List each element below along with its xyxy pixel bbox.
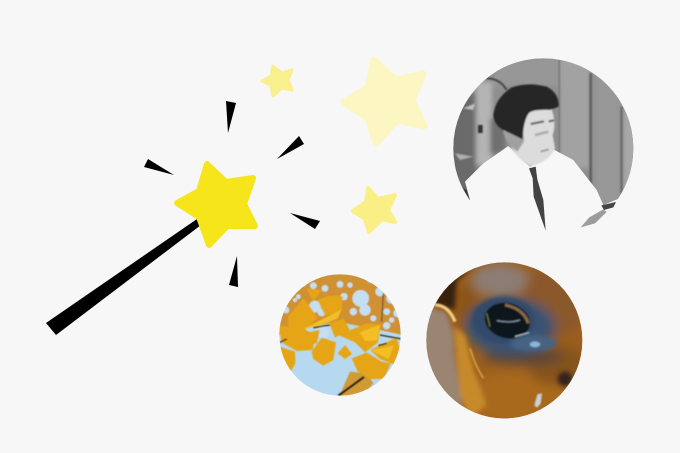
upper orange foliage — [277, 272, 403, 335]
medium star — [353, 188, 395, 232]
sky gaps — [283, 277, 401, 338]
face — [503, 109, 555, 166]
tie — [529, 167, 546, 231]
sparkle rays — [144, 101, 320, 287]
branches — [338, 377, 364, 396]
neck and left band — [426, 306, 465, 407]
photo: horse eye — [423, 260, 587, 425]
large pale star — [344, 60, 424, 143]
gold leaves — [278, 288, 401, 379]
main yellow star — [177, 164, 255, 245]
photo: ginkgo leaves — [277, 272, 403, 398]
eye surround — [472, 297, 535, 343]
magic wand stick — [46, 219, 201, 335]
shirt — [447, 146, 640, 248]
infographic illustration — [46, 56, 634, 418]
hair — [493, 84, 559, 139]
fly — [534, 393, 542, 408]
photo: man in white shirt — [453, 58, 634, 230]
bright leaf highlights — [303, 309, 394, 359]
small star top — [262, 66, 292, 96]
eye — [484, 302, 530, 340]
